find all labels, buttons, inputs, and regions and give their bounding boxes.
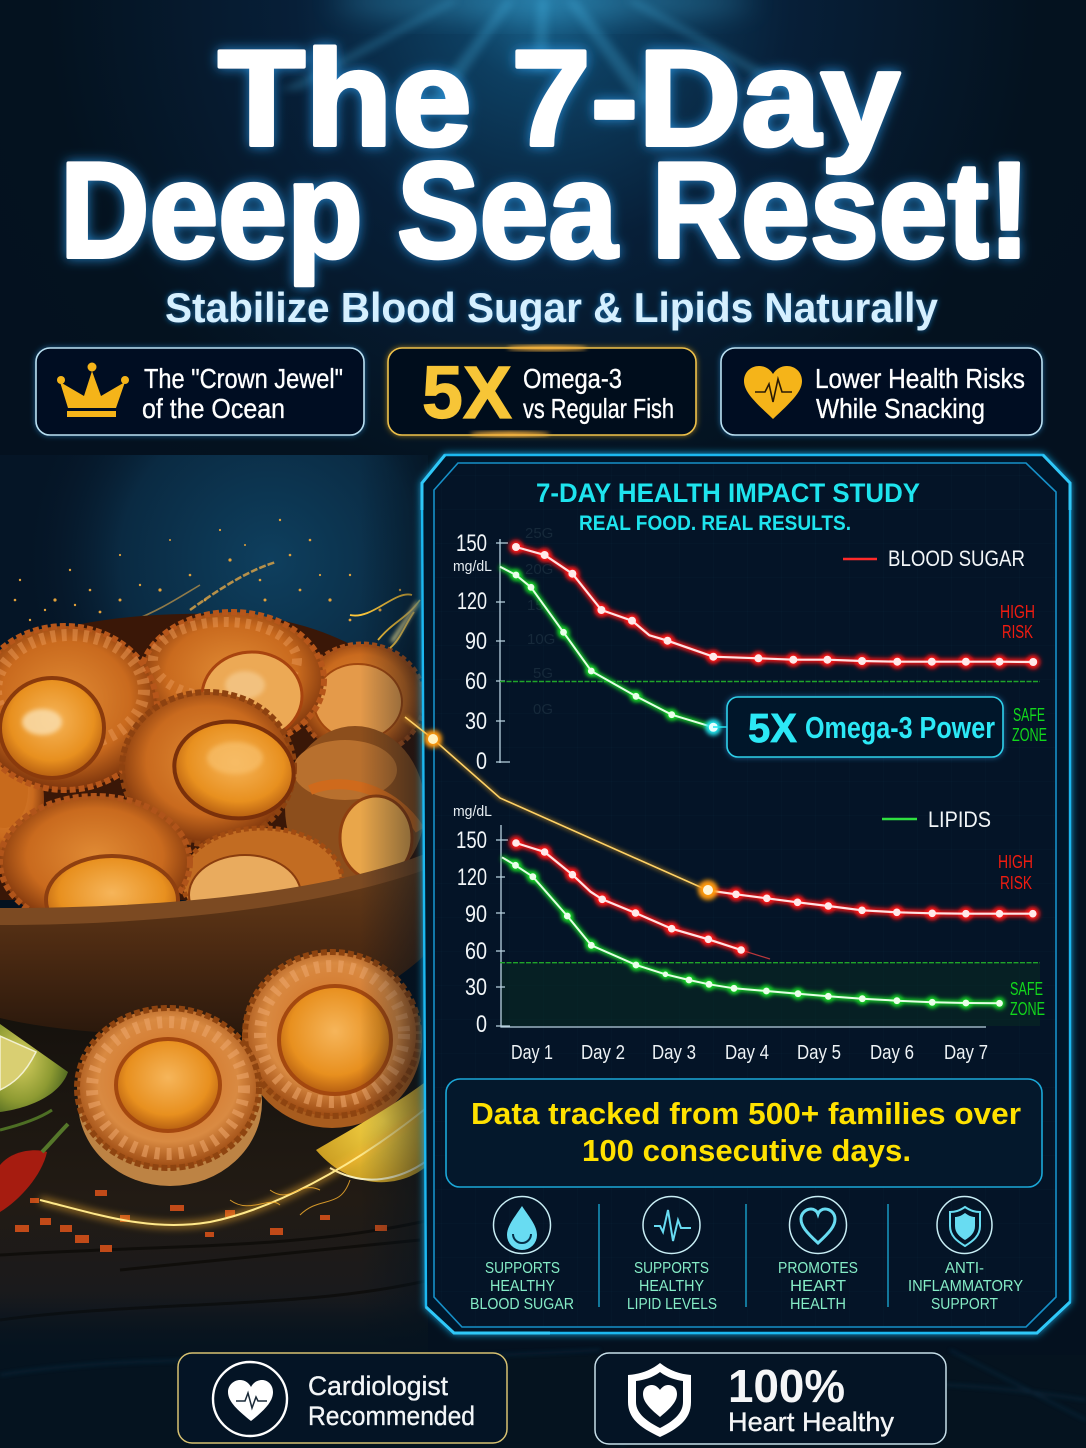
benefit: blood sugar: BLOOD SUGAR xyxy=(470,1296,574,1313)
scallop: right xyxy=(285,726,425,890)
line: blood sugar red xyxy=(509,540,1040,669)
legend: lipids: LIPIDS xyxy=(928,807,991,832)
benefit: heart health xyxy=(778,1196,858,1313)
lime wedge xyxy=(0,1024,68,1112)
day labels: Day 2 xyxy=(581,1042,625,1064)
badge: cardiologist recommended xyxy=(178,1353,507,1443)
badge: lower health risks xyxy=(721,348,1042,435)
text: cardiologist recommended: Recommended xyxy=(308,1401,475,1431)
callout: 5X omega-3 power: Omega-3 Power xyxy=(805,710,995,745)
benefit: blood sugar xyxy=(470,1196,574,1313)
text: cardiologist recommended: Cardiologist xyxy=(308,1371,448,1401)
callout: data tracked xyxy=(446,1079,1042,1187)
line: lipids upper red xyxy=(708,887,1040,921)
chart: lipids: 90 xyxy=(465,901,487,928)
scallop: loose left xyxy=(77,1008,262,1186)
text: 100%: 100% xyxy=(728,1360,845,1412)
label: high risk: HIGH xyxy=(1000,602,1035,622)
chart heading xyxy=(536,478,920,535)
callout: 5X omega-3 power xyxy=(713,697,1003,757)
title xyxy=(60,22,1030,286)
icon: heart in circle xyxy=(213,1362,287,1436)
day labels: Day 1 xyxy=(511,1042,553,1064)
chart: blood sugar: 20G xyxy=(525,561,553,578)
text: omega-3: Omega-3 xyxy=(523,363,622,394)
panel: seafood photo xyxy=(0,450,430,1360)
badge: 5X omega-3 xyxy=(388,346,696,436)
badge: crown jewel xyxy=(36,348,364,435)
lemon wedge xyxy=(316,1080,428,1182)
text: crown jewel: The "Crown Jewel" xyxy=(144,363,343,394)
benefit: lipid levels xyxy=(627,1196,717,1313)
chart: lipids: 60 xyxy=(465,938,487,965)
chilli flakes xyxy=(15,1190,387,1252)
chart: blood sugar: 60 xyxy=(465,668,487,695)
day labels: Day 4 xyxy=(725,1042,769,1064)
subtitle: Stabilize Blood Sugar & Lipids Naturally xyxy=(165,284,939,331)
scallop: centre xyxy=(122,692,301,844)
benefit: blood sugar: SUPPORTS xyxy=(485,1260,560,1277)
chart: lipids: 120 xyxy=(457,864,487,891)
benefit: heart health: HEALTH xyxy=(790,1296,846,1313)
chart: lipids: 30 xyxy=(465,974,487,1001)
day labels xyxy=(511,1042,988,1064)
chart: blood sugar: 25G xyxy=(525,525,553,542)
text: 5X: 5X xyxy=(422,351,512,434)
label: high risk: RISK xyxy=(1002,622,1033,642)
benefit: lipid levels: SUPPORTS xyxy=(634,1260,709,1277)
line: lipids green xyxy=(502,857,1006,1009)
chart: blood sugar: 10G xyxy=(527,631,555,648)
benefit: anti-inflammatory xyxy=(908,1196,1023,1313)
dividers xyxy=(599,1204,888,1307)
label: high risk lower xyxy=(998,852,1033,893)
scallop: top right xyxy=(306,642,422,746)
benefit: anti-inflammatory: SUPPORT xyxy=(931,1296,998,1313)
chart: lipids xyxy=(453,804,1045,1064)
icon: shield heart xyxy=(628,1363,691,1437)
day labels: Day 5 xyxy=(797,1042,841,1064)
day labels: Day 7 xyxy=(944,1042,988,1064)
chart heading: 7-DAY HEALTH IMPACT STUDY xyxy=(536,478,920,508)
label: safe zone lower xyxy=(1010,979,1045,1019)
scallop: lower right xyxy=(182,826,344,901)
scallop: loose right xyxy=(242,952,422,1128)
benefit: anti-inflammatory: INFLAMMATORY xyxy=(908,1278,1023,1295)
gold sparks xyxy=(14,519,401,622)
scallop: top middle xyxy=(140,612,324,748)
benefit: lipid levels: HEALTHY xyxy=(639,1278,704,1295)
chart: blood sugar: 5G xyxy=(533,665,553,682)
callout: data tracked: Data tracked from 500+ families over xyxy=(471,1097,1021,1131)
chart: blood sugar: 90 xyxy=(465,628,487,655)
benefit: heart health: PROMOTES xyxy=(778,1260,858,1277)
chart: blood sugar: 150 xyxy=(456,530,487,557)
chart: blood sugar: 15 xyxy=(527,597,544,614)
wooden table xyxy=(0,1010,424,1322)
chart: blood sugar: 0 xyxy=(476,748,487,775)
chart: blood sugar: 30 xyxy=(465,708,487,735)
label: safe zone lower: ZONE xyxy=(1010,999,1045,1019)
chart heading: REAL FOOD. REAL RESULTS. xyxy=(579,512,851,535)
chart: blood sugar: mg/dL xyxy=(453,559,492,575)
callout: 5X omega-3 power: 5X xyxy=(748,705,797,751)
benefit: heart health: HEART xyxy=(790,1278,846,1295)
panel: health impact study xyxy=(422,455,1070,1333)
legend: lipids xyxy=(882,807,991,832)
chart: lipids: 150 xyxy=(456,827,487,854)
text: crown jewel xyxy=(142,363,343,424)
label: high risk lower: HIGH xyxy=(998,852,1033,872)
label: safe zone: SAFE xyxy=(1013,705,1045,725)
scallop: top left xyxy=(0,626,157,790)
label: high risk lower: RISK xyxy=(1000,873,1032,893)
scallop shadows xyxy=(0,614,430,900)
label: high risk xyxy=(1000,602,1035,642)
label: safe zone lower: SAFE xyxy=(1010,979,1043,999)
day labels: Day 6 xyxy=(870,1042,914,1064)
title: The 7-Day xyxy=(218,22,900,174)
chart: lipids: 0 xyxy=(476,1011,487,1038)
legend: blood sugar: BLOOD SUGAR xyxy=(888,546,1025,571)
day labels: Day 3 xyxy=(652,1042,696,1064)
text: omega-3 xyxy=(523,363,674,424)
benefit: lipid levels: LIPID LEVELS xyxy=(627,1296,717,1313)
chillies xyxy=(0,1110,68,1212)
label: safe zone xyxy=(1012,705,1047,745)
badge: 100% heart healthy xyxy=(595,1353,946,1444)
chart: blood sugar: 0G xyxy=(533,701,553,718)
connector: gold line from scallops to chart xyxy=(405,717,718,900)
text: lower health risks xyxy=(815,363,1025,424)
text: cardiologist recommended xyxy=(308,1371,475,1431)
text: lower health risks: While Snacking xyxy=(816,393,985,424)
bowl body xyxy=(0,860,430,1035)
text: omega-3: vs Regular Fish xyxy=(523,393,674,424)
text: lower health risks: Lower Health Risks xyxy=(815,363,1025,394)
text: heart healthy: Heart Healthy xyxy=(728,1407,895,1437)
chart: lipids: mg/dL xyxy=(453,804,492,820)
chart: blood sugar: 120 xyxy=(457,588,487,615)
chart: blood sugar xyxy=(453,525,1047,775)
lightning streaks xyxy=(40,594,430,1225)
icon: gold heart xyxy=(744,366,802,419)
label: safe zone: ZONE xyxy=(1012,725,1047,745)
scallop: far left xyxy=(0,766,44,859)
line: lipids lower red xyxy=(509,836,770,959)
callout: data tracked: 100 consecutive days. xyxy=(582,1134,911,1168)
benefit: blood sugar: HEALTHY xyxy=(490,1278,555,1295)
scallop: lower left xyxy=(0,793,193,908)
icon: crown xyxy=(57,362,129,417)
line: blood sugar green xyxy=(500,567,721,735)
benefit: anti-inflammatory: ANTI- xyxy=(945,1260,984,1277)
text: crown jewel: of the Ocean xyxy=(142,393,285,424)
